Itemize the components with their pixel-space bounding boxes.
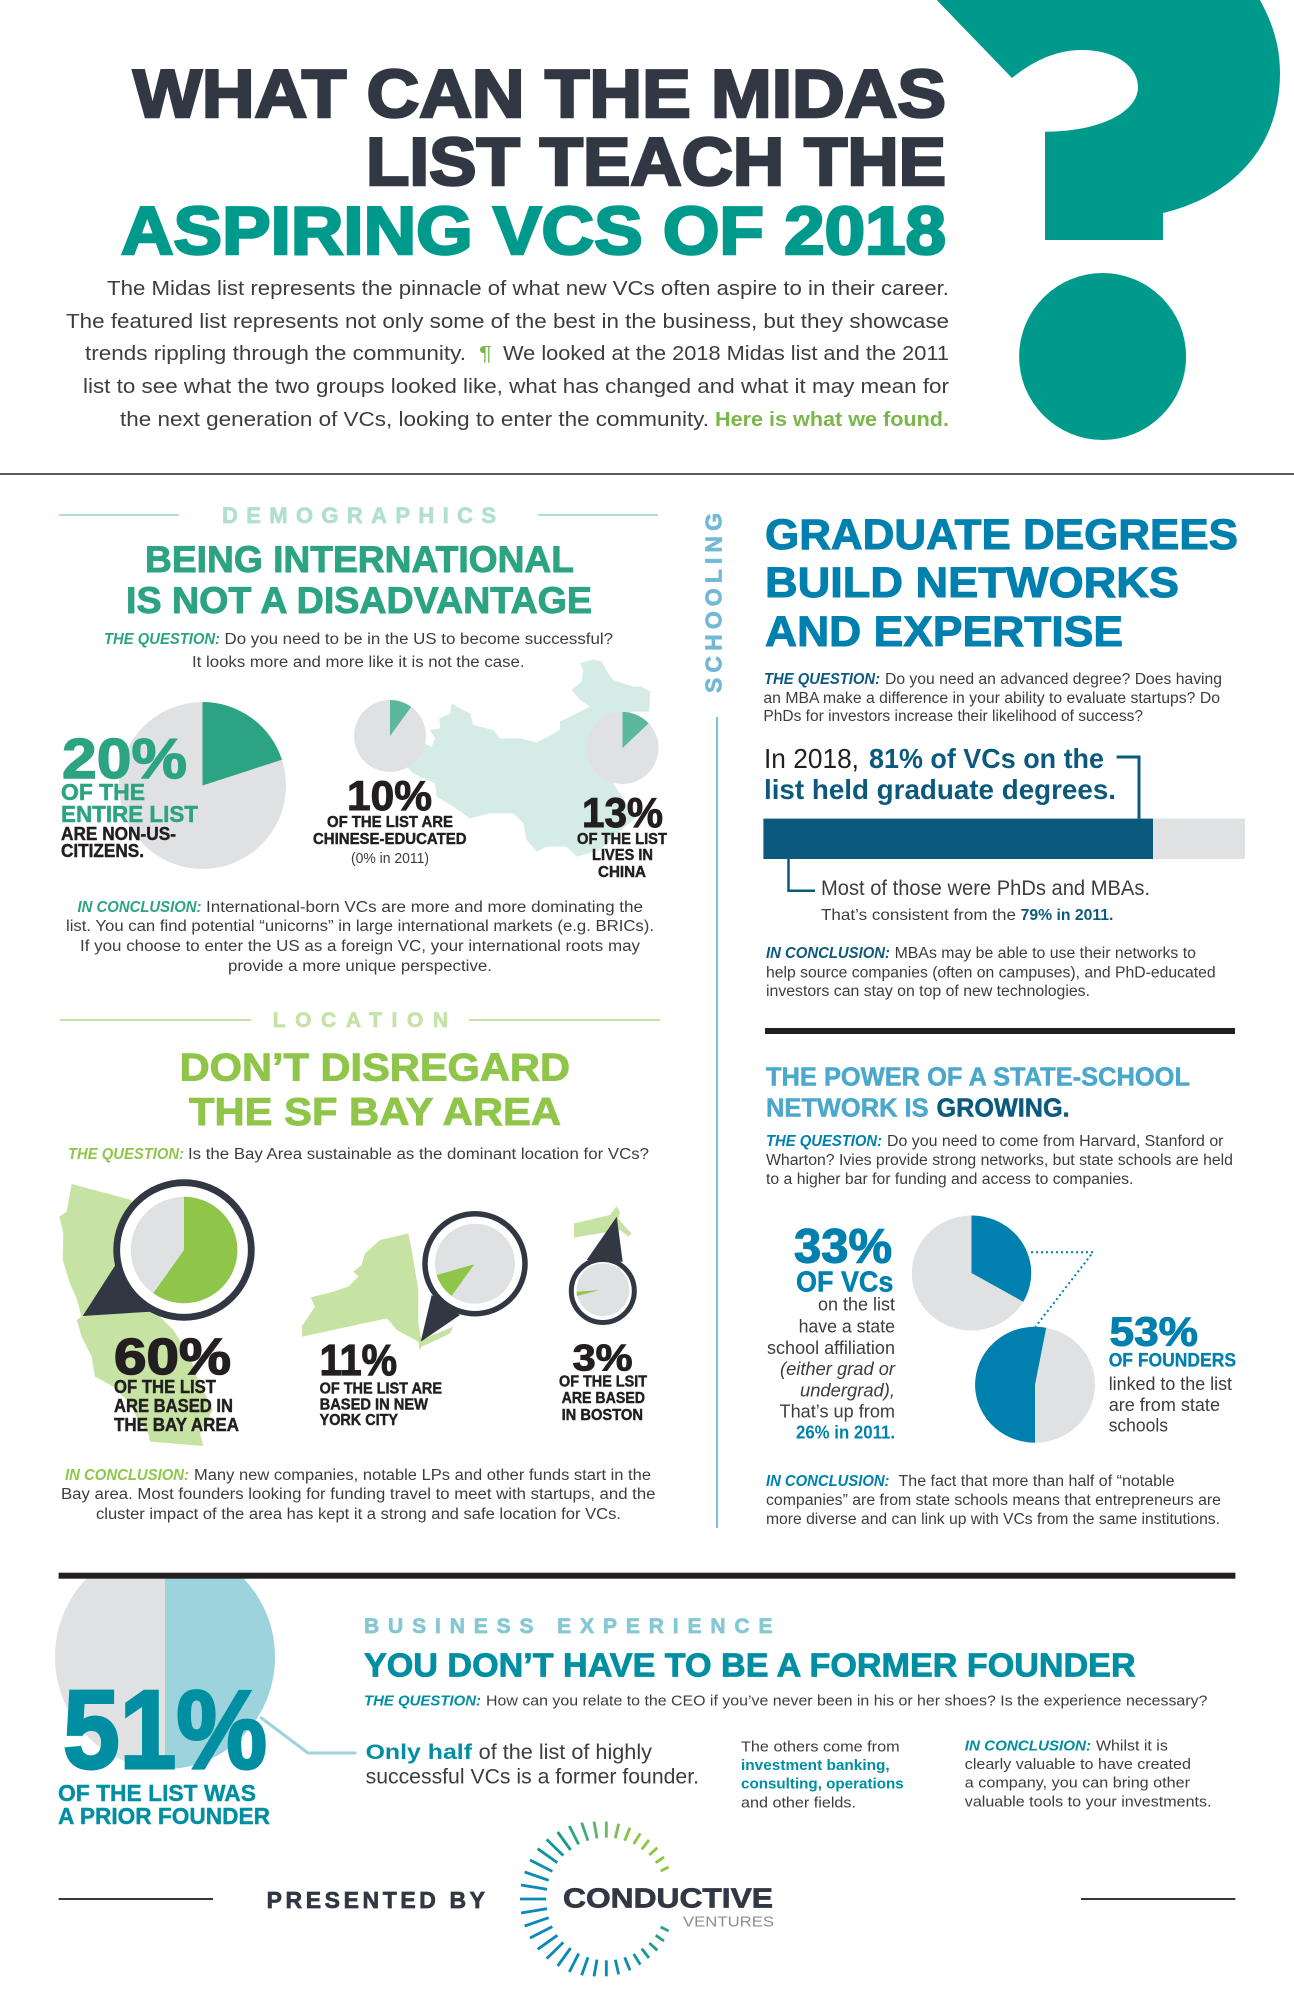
stat: 10 percent: [313, 772, 466, 867]
stat: 11 percent: YORK CITY: [320, 1412, 398, 1429]
heading: being international: [126, 539, 592, 621]
map: China: [400, 659, 650, 857]
stat: 10 percent: OF THE LIST ARE: [327, 814, 453, 831]
callout: only half: of the list of highly: [479, 1740, 652, 1764]
text: state-school conclusion: IN CONCLUSION:: [766, 1473, 890, 1490]
text: PhDs and MBAs: 79% in 2011.: [1021, 907, 1113, 924]
text: business question: How can you relate to the CEO if you’ve never been in his or her shoes? Is the experience necessary?: [486, 1693, 1207, 1710]
section label: demographics: DEMOGRAPHICS: [222, 503, 496, 528]
panel: location: [59, 1009, 660, 1523]
pie chart: 10 percent Chinese-educated: [354, 700, 426, 772]
text: schooling question: an MBA make a difference in your ability to evaluate startups? Do: [763, 690, 1220, 707]
stat: 13 percent: CHINA: [598, 864, 646, 881]
text: business question: THE QUESTION:: [364, 1693, 481, 1710]
map: Massachusetts: [574, 1206, 632, 1238]
stat: 33 percent of VCs: undergrad),: [800, 1380, 895, 1401]
text: others come from: investment banking,: [741, 1757, 890, 1774]
stat: 3 percent: 3%: [573, 1338, 633, 1379]
title: LIST TEACH THE: [366, 124, 946, 200]
icon: Conductive Ventures ring logo: [520, 1822, 669, 1976]
callout: only half: [366, 1740, 699, 1788]
heading: state-school network: GROWING.: [936, 1093, 1070, 1123]
logo wordmark: VENTURES: [683, 1914, 774, 1931]
text: business conclusion: [965, 1738, 1212, 1811]
pie chart: 53 percent: [975, 1327, 1095, 1443]
pin chart: 3 percent Boston: [571, 1217, 634, 1322]
dotted connector: [1031, 1252, 1093, 1327]
stat: 20 percent: ARE NON-US-: [61, 824, 176, 844]
heading: graduate degrees: GRADUATE DEGREES: [765, 511, 1238, 559]
logo wordmark: CONDUCTIVE: [563, 1883, 773, 1914]
callout: 81 percent: 81% of VCs on the: [869, 743, 1104, 774]
callout: 81 percent: [764, 743, 1116, 805]
text: demographics conclusion: [66, 899, 654, 975]
intro paragraph: [66, 277, 949, 431]
title: [121, 56, 946, 269]
panel: schooling: [700, 511, 1245, 1528]
text: business conclusion: Whilst it is: [1096, 1738, 1168, 1755]
intro paragraph: The Midas list represents the pinnacle of what new VCs often aspire to in their career.: [107, 277, 949, 300]
text: others come from: consulting, operations: [741, 1776, 904, 1793]
heading: graduate degrees: AND EXPERTISE: [765, 608, 1123, 656]
text: state-school conclusion: The fact that more than half of “notable: [898, 1473, 1174, 1490]
text: graduate degrees conclusion: IN CONCLUSION:: [766, 945, 890, 962]
text: others come from: [741, 1739, 904, 1812]
stat: 3 percent: OF THE LSIT: [559, 1374, 647, 1390]
stat: 33 percent of VCs: (either grad or: [780, 1358, 896, 1379]
pin chart: 60 percent Bay Area: [83, 1183, 251, 1317]
logo wordmark: [563, 1883, 774, 1931]
pie chart: 20 percent non-US citizens: [119, 702, 286, 869]
icon: large question mark: [937, 0, 1280, 440]
stat: 11 percent: 11%: [320, 1336, 397, 1385]
stat: 53 percent of founders: 53%: [1110, 1309, 1198, 1355]
stat: 60 percent: ARE BASED IN: [114, 1396, 233, 1416]
intro paragraph: Here is what we found.: [715, 408, 949, 431]
intro paragraph: ¶: [479, 342, 492, 365]
text: business conclusion: a company, you can bring other: [965, 1775, 1190, 1792]
stat: 10 percent: CHINESE-EDUCATED: [313, 831, 466, 848]
stat: 3 percent: IN BOSTON: [562, 1407, 643, 1424]
stat: 3 percent: [559, 1338, 647, 1424]
section label: location: LOCATION: [273, 1009, 448, 1032]
stat: 20 percent: ENTIRE LIST: [61, 801, 198, 827]
text: location question: Is the Bay Area sustainable as the dominant location for VCs?: [188, 1146, 649, 1163]
text: state-school conclusion: companies” are from state schools means that entrepreneurs are: [766, 1492, 1221, 1509]
stat: 51 percent: OF THE LIST WAS: [58, 1780, 256, 1806]
text: PhDs and MBAs: Most of those were PhDs and MBAs.: [821, 877, 1150, 900]
intro paragraph: trends rippling through the community.: [85, 342, 466, 365]
stat: 13 percent: OF THE LIST: [577, 831, 668, 848]
heading: graduate degrees: BUILD NETWORKS: [765, 559, 1179, 607]
text: demographics question: It looks more and more like it is not the case.: [192, 654, 524, 671]
heading: graduate degrees: [765, 511, 1238, 656]
callout: only half: successful VCs is a former founder.: [366, 1764, 699, 1788]
heading: former founder: YOU DON’T HAVE TO BE A FORMER FOUNDER: [364, 1647, 1136, 1684]
stat: 20 percent: CITIZENS.: [61, 841, 144, 861]
heading: state-school network: [766, 1062, 1190, 1123]
text: state-school conclusion: more diverse and can link up with VCs from the same institutions.: [766, 1511, 1220, 1528]
stat: 10 percent: (0% in 2011): [351, 851, 429, 867]
text: demographics question: THE QUESTION:: [104, 631, 220, 648]
stat: 33 percent of VCs: school affiliation: [767, 1337, 895, 1358]
panel: business experience: [55, 1572, 1236, 1824]
text: state-school question: Do you need to come from Harvard, Stanford or: [887, 1133, 1224, 1150]
footer: presented by: PRESENTED BY: [267, 1887, 485, 1913]
stat: 53 percent of founders: schools: [1109, 1415, 1168, 1436]
heading: state-school network: THE POWER OF A STATE-SCHOOL: [766, 1062, 1190, 1092]
stat: 51 percent: A PRIOR FOUNDER: [58, 1803, 270, 1829]
text: schooling question: [763, 671, 1222, 725]
callout: 81 percent: list held graduate degrees.: [764, 774, 1116, 805]
stat: 20 percent: [61, 727, 198, 861]
stat: 33 percent of VCs: That’s up from: [780, 1401, 895, 1422]
stat: 11 percent: [320, 1336, 442, 1429]
text: state-school question: [766, 1133, 1233, 1188]
heading: don't disregard: DON’T DISREGARD: [180, 1046, 570, 1090]
stat: 20 percent: OF THE: [61, 779, 145, 805]
stat: 3 percent: ARE BASED: [562, 1390, 645, 1407]
callout: only half: Only half: [366, 1740, 473, 1764]
connector line: [260, 1717, 356, 1753]
text: location question: THE QUESTION:: [68, 1146, 184, 1163]
intro paragraph: We looked at the 2018 Midas list and the 2011: [503, 342, 949, 365]
stat: 11 percent: BASED IN NEW: [320, 1397, 429, 1414]
heading: state-school network: NETWORK IS: [766, 1093, 929, 1123]
text: demographics question: Do you need to be in the US to become successful?: [224, 631, 613, 648]
text: location conclusion: Bay area. Most founders looking for funding travel to meet with startups, and the: [61, 1486, 656, 1503]
text: location conclusion: [61, 1467, 656, 1523]
pie chart: 13 percent live in China: [586, 712, 658, 784]
map: New York: [302, 1233, 453, 1350]
stat: 10 percent: 10%: [347, 772, 432, 819]
text: others come from: The others come from: [741, 1739, 900, 1756]
heading: don't disregard: [180, 1046, 570, 1134]
stat: 60 percent: [114, 1328, 239, 1435]
stat: 53 percent of founders: are from state: [1109, 1394, 1220, 1415]
text: graduate degrees conclusion: MBAs may be able to use their networks to: [895, 945, 1196, 962]
stat: 11 percent: OF THE LIST ARE: [320, 1380, 442, 1398]
text: others come from: and other fields.: [741, 1795, 856, 1812]
section label: schooling: SCHOOLING: [700, 513, 726, 693]
text: demographics conclusion: International-born VCs are more and more dominating the: [206, 899, 643, 916]
text: PhDs and MBAs: That’s consistent from the: [821, 907, 1016, 924]
text: location conclusion: IN CONCLUSION:: [65, 1467, 189, 1484]
stat: 60 percent: OF THE LIST: [114, 1377, 216, 1397]
text: schooling question: THE QUESTION:: [764, 671, 880, 688]
stat: 13 percent: [577, 789, 668, 881]
text: graduate degrees conclusion: [766, 945, 1216, 1000]
stat: 53 percent of founders: [1109, 1309, 1236, 1436]
stat: 13 percent: LIVES IN: [592, 847, 653, 864]
text: state-school conclusion: [766, 1473, 1221, 1528]
pin chart: 11 percent New York: [421, 1214, 525, 1342]
text: location conclusion: cluster impact of the area has kept it a strong and safe location for VCs.: [96, 1506, 621, 1523]
text: location conclusion: Many new companies, notable LPs and other funds start in the: [194, 1467, 651, 1484]
stat: 20 percent: 20%: [62, 727, 187, 791]
heading: don't disregard: THE SF BAY AREA: [189, 1091, 561, 1134]
panel: demographics: [59, 503, 668, 975]
text: demographics conclusion: IN CONCLUSION:: [78, 899, 202, 916]
stat: 13 percent: 13%: [582, 789, 663, 836]
text: business conclusion: valuable tools to your investments.: [965, 1794, 1212, 1811]
text: demographics question: [104, 631, 613, 671]
stat: 53 percent of founders: OF FOUNDERS: [1109, 1351, 1236, 1372]
text: schooling question: Do you need an advanced degree? Does having: [885, 671, 1222, 688]
stat: 33 percent of VCs: OF VCs: [796, 1267, 893, 1299]
stat: 53 percent of founders: linked to the list: [1109, 1373, 1232, 1394]
stat: 33 percent of VCs: 26% in 2011.: [796, 1422, 895, 1443]
text: PhDs and MBAs: [821, 877, 1150, 924]
text: demographics conclusion: list. You can find potential “unicorns” in large international markets (e.g. BRICs).: [66, 918, 654, 935]
stat: 60 percent: THE BAY AREA: [114, 1415, 239, 1435]
stat: 33 percent of VCs: have a state: [799, 1316, 895, 1337]
text: state-school question: Wharton? Ivies provide strong networks, but state schools are held: [766, 1152, 1233, 1169]
map: California: [59, 1184, 213, 1446]
text: business conclusion: clearly valuable to have created: [965, 1756, 1191, 1773]
stat: 33 percent of VCs: 33%: [794, 1221, 892, 1274]
intro paragraph: The featured list represents not only some of the best in the business, but they showcase: [66, 310, 949, 333]
intro paragraph: the next generation of VCs, looking to enter the community.: [120, 408, 709, 431]
stat: 33 percent of VCs: on the list: [818, 1294, 895, 1315]
heading: being international: BEING INTERNATIONAL: [145, 539, 574, 580]
text: state-school question: THE QUESTION:: [766, 1133, 882, 1150]
callout: 81 percent: In 2018,: [764, 743, 859, 774]
text: schooling question: PhDs for investors increase their likelihood of success?: [763, 708, 1143, 725]
pie chart: 33 percent: [912, 1216, 1031, 1330]
stat: 51 percent: 51%: [63, 1668, 267, 1792]
text: graduate degrees conclusion: investors can stay on top of new technologies.: [766, 983, 1090, 1000]
text: business conclusion: IN CONCLUSION:: [965, 1738, 1091, 1755]
heading: being international: IS NOT A DISADVANTAGE: [126, 580, 592, 621]
section label: business experience: BUSINESS EXPERIENCE: [364, 1615, 772, 1638]
stat: 33 percent of VCs: [767, 1221, 896, 1443]
pie chart: 51 percent prior founder: [55, 1578, 275, 1769]
title: WHAT CAN THE MIDAS: [133, 56, 946, 132]
title: ASPIRING VCS OF 2018: [121, 193, 946, 269]
text: demographics conclusion: provide a more unique perspective.: [228, 958, 492, 975]
bar chart: 81 percent graduate degrees: [763, 757, 1245, 891]
intro paragraph: list to see what the two groups looked like, what has changed and what it may mean for: [83, 375, 949, 398]
stat: 60 percent: 60%: [114, 1328, 231, 1385]
text: graduate degrees conclusion: help source companies (often on campuses), and PhD-educated: [766, 964, 1216, 982]
text: state-school question: to a higher bar for funding and access to companies.: [766, 1171, 1133, 1188]
text: demographics conclusion: If you choose to enter the US as a foreign VC, your international roots may: [80, 938, 640, 955]
